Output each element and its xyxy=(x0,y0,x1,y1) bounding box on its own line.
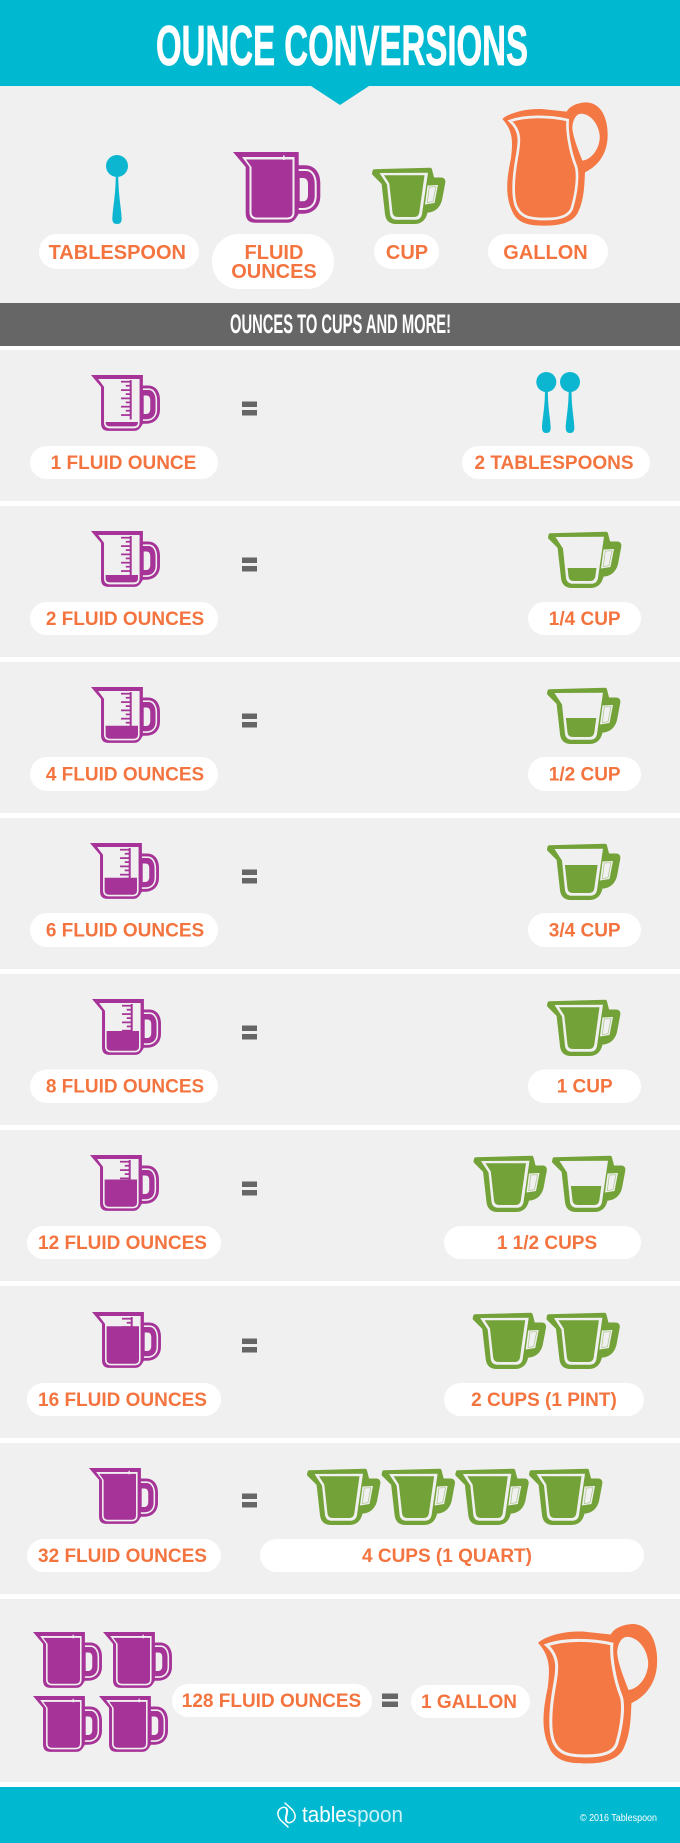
label: 1 1/2 cups xyxy=(444,1226,641,1259)
subheading band xyxy=(0,303,680,346)
row: 8 fluid ounces xyxy=(30,999,641,1103)
icon: full beaker xyxy=(89,1468,158,1524)
icon: one and a half cups xyxy=(476,1158,623,1210)
icon: cup xyxy=(374,170,443,222)
row: 4 fluid ounces xyxy=(30,687,641,791)
label: 1/4 cup: 1/4 CUP xyxy=(549,609,621,630)
label: 16 fluid ounces: 16 FLUID OUNCES xyxy=(38,1390,207,1411)
label: 2 cups (1 pint) xyxy=(444,1383,644,1416)
label: 6 fluid ounces xyxy=(30,913,218,947)
label: 2 fluid ounces xyxy=(30,602,218,635)
equals sign xyxy=(242,558,257,572)
icon: beaker with 4 oz xyxy=(91,687,160,743)
logo wordmark: tablespoon xyxy=(302,1802,403,1827)
label: 12 fluid ounces xyxy=(27,1226,221,1259)
icon: four cups xyxy=(309,1471,600,1523)
label: gallon: GALLON xyxy=(503,242,588,264)
icon: gallon pitcher xyxy=(538,1624,657,1763)
icon: cup three quarters full xyxy=(549,846,618,898)
row: 16 fluid ounces xyxy=(27,1312,644,1416)
label: 2 cups (1 pint): 2 CUPS (1 PINT) xyxy=(471,1390,617,1411)
equals sign xyxy=(242,714,257,728)
label: 1 fluid ounce xyxy=(30,446,218,479)
label: 2 fluid ounces: 2 FLUID OUNCES xyxy=(46,609,204,630)
icon: full cup xyxy=(549,1002,618,1054)
icon: beaker with 6 oz xyxy=(90,843,159,899)
row: 1 fluid ounce xyxy=(30,372,650,479)
label: 4 cups (1 quart): 4 CUPS (1 QUART) xyxy=(362,1546,532,1567)
label: 16 fluid ounces xyxy=(27,1383,221,1416)
label: 1 fluid ounce: 1 FLUID OUNCE xyxy=(51,453,196,474)
label: fluid ounces: OUNCES xyxy=(231,261,317,283)
label: 1/4 cup xyxy=(528,602,641,635)
icon: beaker with 8 oz xyxy=(92,999,161,1055)
subheading band: OUNCES TO CUPS AND MORE! xyxy=(230,309,451,339)
icon: beaker with 2 oz xyxy=(91,531,160,587)
label: 32 fluid ounces: 32 FLUID OUNCES xyxy=(38,1546,207,1567)
label: 1 1/2 cups: 1 1/2 CUPS xyxy=(497,1233,597,1254)
icon: beaker with 16 oz xyxy=(92,1312,161,1368)
panel: intro background xyxy=(0,86,680,303)
label: 4 fluid ounces: 4 FLUID OUNCES xyxy=(46,764,204,786)
label: 128 fluid ounces xyxy=(172,1684,372,1717)
icon: gallon pitcher xyxy=(502,102,608,226)
label: 1 cup: 1 CUP xyxy=(557,1076,613,1098)
icon: two cups xyxy=(475,1315,618,1367)
label: gallon xyxy=(488,234,608,269)
label: 3/4 cup xyxy=(528,913,641,947)
icon: fluid ounce beaker xyxy=(233,152,320,223)
equals sign xyxy=(242,1494,257,1508)
label: tablespoon: TABLESPOON xyxy=(49,242,186,264)
equals sign xyxy=(242,402,257,416)
header banner xyxy=(0,0,680,105)
icon: beaker with 12 oz xyxy=(90,1155,159,1211)
icon: two tablespoons xyxy=(536,372,580,433)
icon: four full beakers xyxy=(33,1632,172,1752)
equals sign xyxy=(242,1026,257,1040)
label: 12 fluid ounces: 12 FLUID OUNCES xyxy=(38,1233,207,1254)
panel: unit legend xyxy=(39,102,608,289)
label: 4 cups (1 quart) xyxy=(260,1539,644,1572)
row: 2 fluid ounces xyxy=(30,531,641,635)
label: 1/2 cup: 1/2 CUP xyxy=(549,764,621,786)
label: 1 cup xyxy=(528,1070,641,1103)
equals sign xyxy=(382,1694,398,1707)
label: tablespoon xyxy=(39,234,199,269)
row: 12 fluid ounces xyxy=(27,1155,641,1259)
label: 4 fluid ounces xyxy=(30,757,218,791)
equals sign xyxy=(242,1338,257,1352)
label: 1/2 cup xyxy=(528,757,641,791)
copyright: © 2016 Tablespoon xyxy=(580,1813,657,1824)
footer band xyxy=(0,1787,680,1843)
label: 1 gallon: 1 GALLON xyxy=(421,1692,517,1713)
label: 3/4 cup: 3/4 CUP xyxy=(549,920,621,942)
icon: cup half full xyxy=(549,690,618,742)
panel: conversions background xyxy=(0,350,680,1782)
label: cup xyxy=(374,234,439,269)
row: 32 fluid ounces xyxy=(27,1468,644,1572)
label: fluid ounces: FLUID xyxy=(245,242,303,264)
icon: cup quarter full xyxy=(550,534,619,586)
icon: beaker with 1 oz xyxy=(91,375,160,431)
row: 128 fluid ounces xyxy=(33,1624,657,1763)
label: 2 tablespoons xyxy=(462,446,650,479)
label: 6 fluid ounces: 6 FLUID OUNCES xyxy=(46,920,204,942)
equals sign xyxy=(242,1182,257,1196)
label: 8 fluid ounces: 8 FLUID OUNCES xyxy=(46,1076,204,1098)
label: 128 fluid ounces: 128 FLUID OUNCES xyxy=(182,1691,361,1712)
row: 6 fluid ounces xyxy=(30,843,641,947)
icon: tablespoon logo xyxy=(278,1803,295,1827)
label: 8 fluid ounces xyxy=(30,1070,218,1103)
equals sign xyxy=(242,870,257,884)
label: fluid ounces xyxy=(212,234,334,289)
label: 2 tablespoons: 2 TABLESPOONS xyxy=(474,453,634,474)
label: cup: CUP xyxy=(386,242,428,264)
label: 1 gallon xyxy=(411,1685,530,1718)
icon: tablespoon xyxy=(106,155,128,224)
label: 32 fluid ounces xyxy=(27,1539,221,1572)
